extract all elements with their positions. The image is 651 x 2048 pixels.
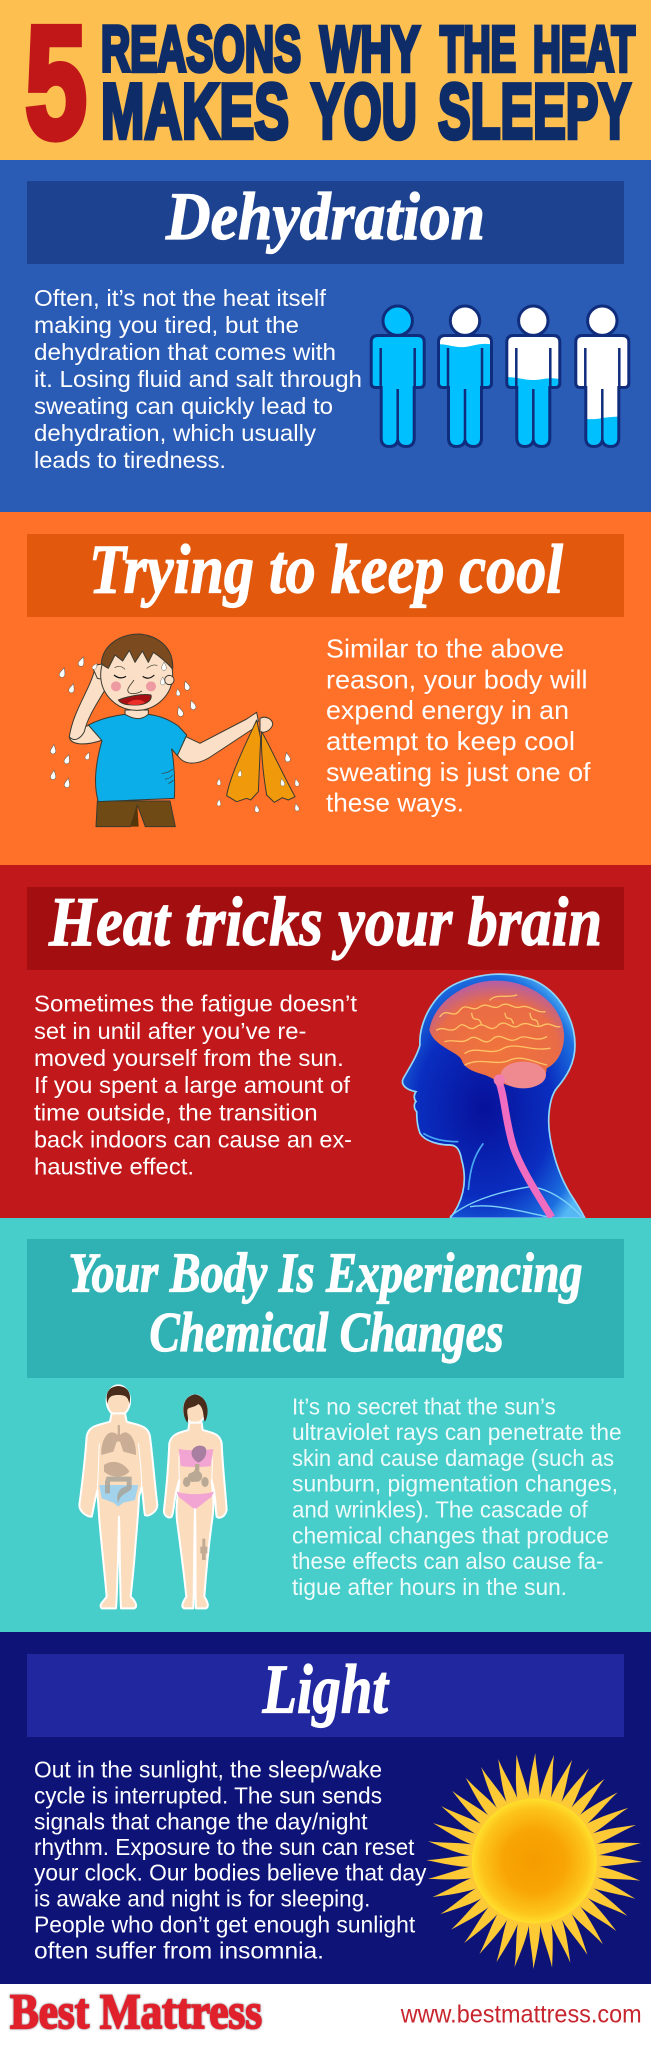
- body text: chemical changes: tigue after hours in the sun.: [292, 1574, 567, 1600]
- body text: brain: moved yourself from the sun.: [34, 1045, 344, 1071]
- body text: light: is awake and night is for sleeping.: [34, 1886, 370, 1912]
- title: THE: [440, 13, 516, 85]
- heading: Dehydration: Dehydration: [165, 178, 485, 254]
- icon: hydration figures: [371, 306, 632, 450]
- body text: keep cool: reason, your body will: [326, 664, 588, 694]
- panel: dehydration: [0, 160, 651, 512]
- sweat drops: [50, 656, 300, 813]
- body text: brain: set in until after you’ve re-: [34, 1018, 306, 1044]
- body text: keep cool: these ways.: [326, 788, 464, 818]
- body text: light: Out in the sunlight, the sleep/wake: [34, 1757, 382, 1783]
- figure: full: [371, 306, 424, 446]
- body text: chemical changes: ultraviolet rays can penetrate the: [292, 1419, 622, 1445]
- body text: chemical changes: [292, 1393, 622, 1600]
- panel: header: [0, 0, 651, 172]
- brain: [429, 981, 564, 1217]
- body text: chemical changes: skin and cause damage (such as: [292, 1445, 614, 1471]
- body text: light: signals that change the day/night: [34, 1808, 368, 1834]
- body text: chemical changes: chemical changes that produce: [292, 1522, 609, 1548]
- panel: heat tricks your brain: [0, 865, 651, 1218]
- title: YOU: [311, 67, 417, 155]
- illustration: head with brain: [402, 974, 585, 1218]
- title: [101, 13, 635, 155]
- body text: brain: haustive effect.: [34, 1154, 194, 1180]
- panel: chemical changes: [0, 1218, 651, 1632]
- body text: chemical changes: these effects can also cause fa-: [292, 1548, 604, 1574]
- body text: light: rhythm. Exposure to the sun can reset: [34, 1834, 415, 1860]
- body text: chemical changes: It’s no secret that the sun’s: [292, 1393, 556, 1419]
- body text: brain: If you spent a large amount of: [34, 1072, 350, 1098]
- title: REASONS: [101, 13, 301, 85]
- body text: dehydration: leads to tiredness.: [34, 447, 226, 473]
- body text: light: your clock. Our bodies believe that day: [34, 1860, 427, 1886]
- figure: low: [572, 306, 632, 450]
- figure: three quarters: [435, 306, 495, 450]
- heading: Trying to keep cool: Trying to keep cool: [89, 532, 563, 609]
- figure: male: [79, 1385, 157, 1608]
- figure: female: [164, 1394, 227, 1608]
- heading: Your Body Is Experiencing Chemical Changes: Chemical Changes: [150, 1302, 504, 1364]
- title: WHY: [320, 13, 420, 85]
- body text: brain: time outside, the transition: [34, 1100, 318, 1126]
- logo: Best Mattress: Best Mattress: [10, 1983, 262, 2039]
- body text: light: People who don’t get enough sunlight: [34, 1911, 416, 1937]
- body text: brain: back indoors can cause an ex-: [34, 1126, 352, 1152]
- panel: light: [0, 1632, 651, 1984]
- body text: brain: [34, 991, 357, 1180]
- panel: trying to keep cool: [0, 512, 651, 865]
- body text: dehydration: Often, it’s not the heat itself: [34, 285, 326, 311]
- title: MAKES: [101, 67, 289, 155]
- body text: keep cool: attempt to keep cool: [326, 726, 575, 756]
- body text: dehydration: dehydration that comes with: [34, 339, 336, 365]
- illustration: male and female anatomy: [79, 1385, 227, 1608]
- body text: keep cool: [326, 634, 591, 818]
- body text: brain: Sometimes the fatigue doesn’t: [34, 991, 357, 1017]
- body text: light: often suffer from insomnia.: [34, 1937, 324, 1963]
- body text: dehydration: making you tired, but the: [34, 312, 299, 338]
- body text: dehydration: sweating can quickly lead to: [34, 393, 333, 419]
- heading: Your Body Is Experiencing Chemical Changes: [68, 1243, 582, 1364]
- body text: dehydration: [34, 285, 362, 473]
- body text: keep cool: sweating is just one of: [326, 757, 591, 787]
- heading: Light: Light: [262, 1652, 390, 1729]
- figure: half: [503, 306, 563, 450]
- website url: www.bestmattress.com: [400, 2000, 642, 2028]
- illustration: sweating boy: [50, 634, 300, 827]
- body text: keep cool: expend energy in an: [326, 695, 569, 725]
- body text: chemical changes: sunburn, pigmentation changes,: [292, 1471, 618, 1497]
- body text: light: cycle is interrupted. The sun sends: [34, 1782, 382, 1808]
- body text: chemical changes: and wrinkles). The cascade of: [292, 1496, 588, 1522]
- body text: keep cool: Similar to the above: [326, 634, 564, 664]
- body text: light: [34, 1757, 427, 1963]
- body text: dehydration: it. Losing fluid and salt through: [34, 366, 362, 392]
- icon: sun: [426, 1753, 642, 1969]
- panel: footer: [0, 1983, 651, 2048]
- body text: dehydration: dehydration, which usually: [34, 420, 316, 446]
